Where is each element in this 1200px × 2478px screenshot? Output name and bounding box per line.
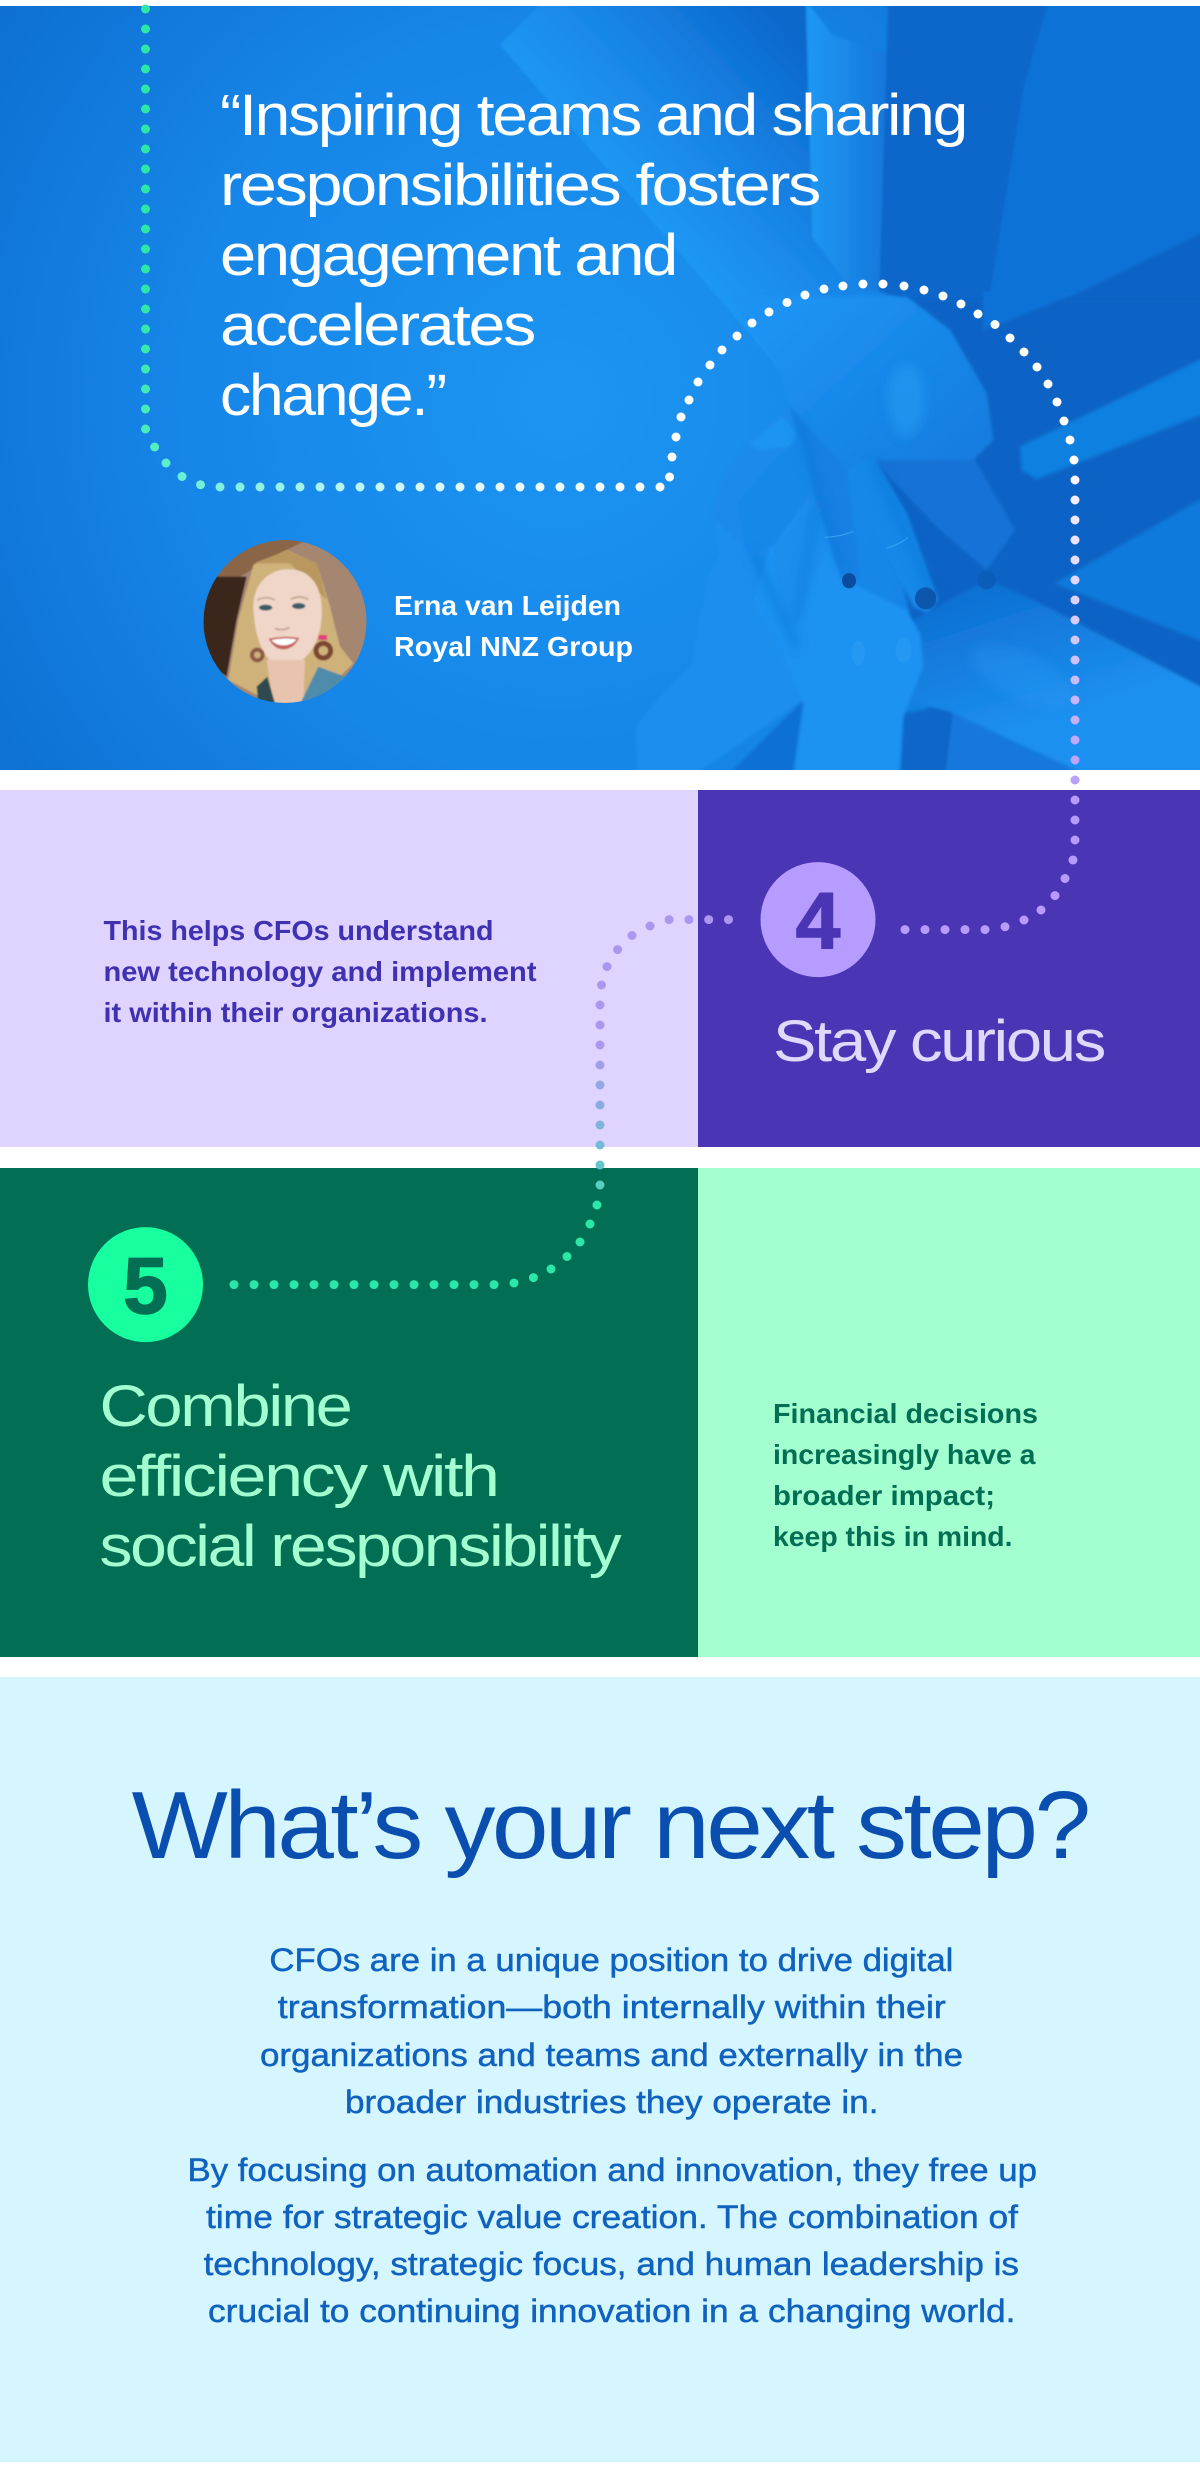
badge: number 4: 4 [796, 876, 841, 965]
panel: quote hero [0, 0, 1200, 807]
text: second paragraph: By focusing on automation and innovation, they free up [188, 2152, 1037, 2188]
icon: nails [842, 571, 996, 609]
text: first paragraph: transformation—both internally within their [278, 1989, 946, 2025]
heading: stay curious: Stay curious [773, 1009, 1104, 1074]
text: social responsibility description: increasingly have a [773, 1439, 1036, 1470]
dotted line: down to step 4 [904, 480, 1078, 931]
image: stacked hands [637, 292, 1200, 807]
dotted line: step 4 to step 5 [233, 920, 728, 1288]
text: second paragraph: time for strategic value creation. The combination of [206, 2199, 1018, 2235]
dotted line: green to white around the quote [146, 9, 661, 489]
text: first paragraph: organizations and teams and externally in the [260, 2037, 963, 2073]
panel: step 5 [0, 1168, 698, 1657]
panel: step 4 [698, 790, 1200, 1147]
text: social responsibility description: Financial decisions [773, 1398, 1038, 1429]
text: stay curious description: it within their organizations. [104, 997, 488, 1028]
heading: quote: engagement and [220, 223, 676, 288]
heading: combine efficiency [100, 1374, 622, 1579]
portrait: Erna van Leijden [200, 537, 370, 707]
text: second paragraph: crucial to continuing innovation in a changing world. [208, 2293, 1016, 2329]
heading: combine efficiency: social responsibility [100, 1514, 622, 1579]
text: social responsibility description [773, 1398, 1038, 1552]
panel: next step [0, 1677, 1200, 2462]
badge: number 4 [760, 862, 876, 977]
text: second paragraph [188, 2152, 1037, 2329]
heading: quote: accelerates [220, 293, 534, 358]
attribution: name and company: Royal NNZ Group [394, 631, 633, 662]
panel: social responsibility description [698, 1168, 1200, 1657]
heading: quote: “Inspiring teams and sharing [220, 83, 966, 148]
badge: number 5: 5 [123, 1241, 168, 1330]
text: second paragraph: technology, strategic focus, and human leadership is [204, 2246, 1019, 2282]
heading: combine efficiency: Combine [100, 1374, 350, 1439]
heading: what's your next step: What’s your next step? [132, 1772, 1088, 1879]
text: social responsibility description: keep this in mind. [773, 1521, 1012, 1552]
badge: number 5 [88, 1227, 203, 1342]
text: stay curious description [104, 915, 536, 1028]
icon: finger rings [825, 532, 908, 548]
text: first paragraph: CFOs are in a unique position to drive digital [269, 1942, 953, 1978]
dotted line: arch over the hands [665, 280, 1078, 482]
image: arms at the top of the photo [501, 6, 1200, 338]
text: stay curious description: This helps CFOs understand [104, 915, 494, 946]
panel: stay curious description [0, 790, 698, 1147]
heading: quote: change.” [220, 363, 446, 428]
text: first paragraph: broader industries they operate in. [345, 2084, 878, 2120]
heading: quote: responsibilities fosters [220, 153, 819, 218]
heading: quote [220, 83, 966, 428]
heading: combine efficiency: efficiency with [100, 1444, 498, 1509]
attribution: name and company: Erna van Leijden [394, 590, 621, 621]
text: stay curious description: new technology and implement [104, 956, 536, 987]
text: social responsibility description: broader impact; [773, 1480, 995, 1511]
attribution: name and company [394, 590, 633, 662]
text: first paragraph [260, 1942, 963, 2120]
